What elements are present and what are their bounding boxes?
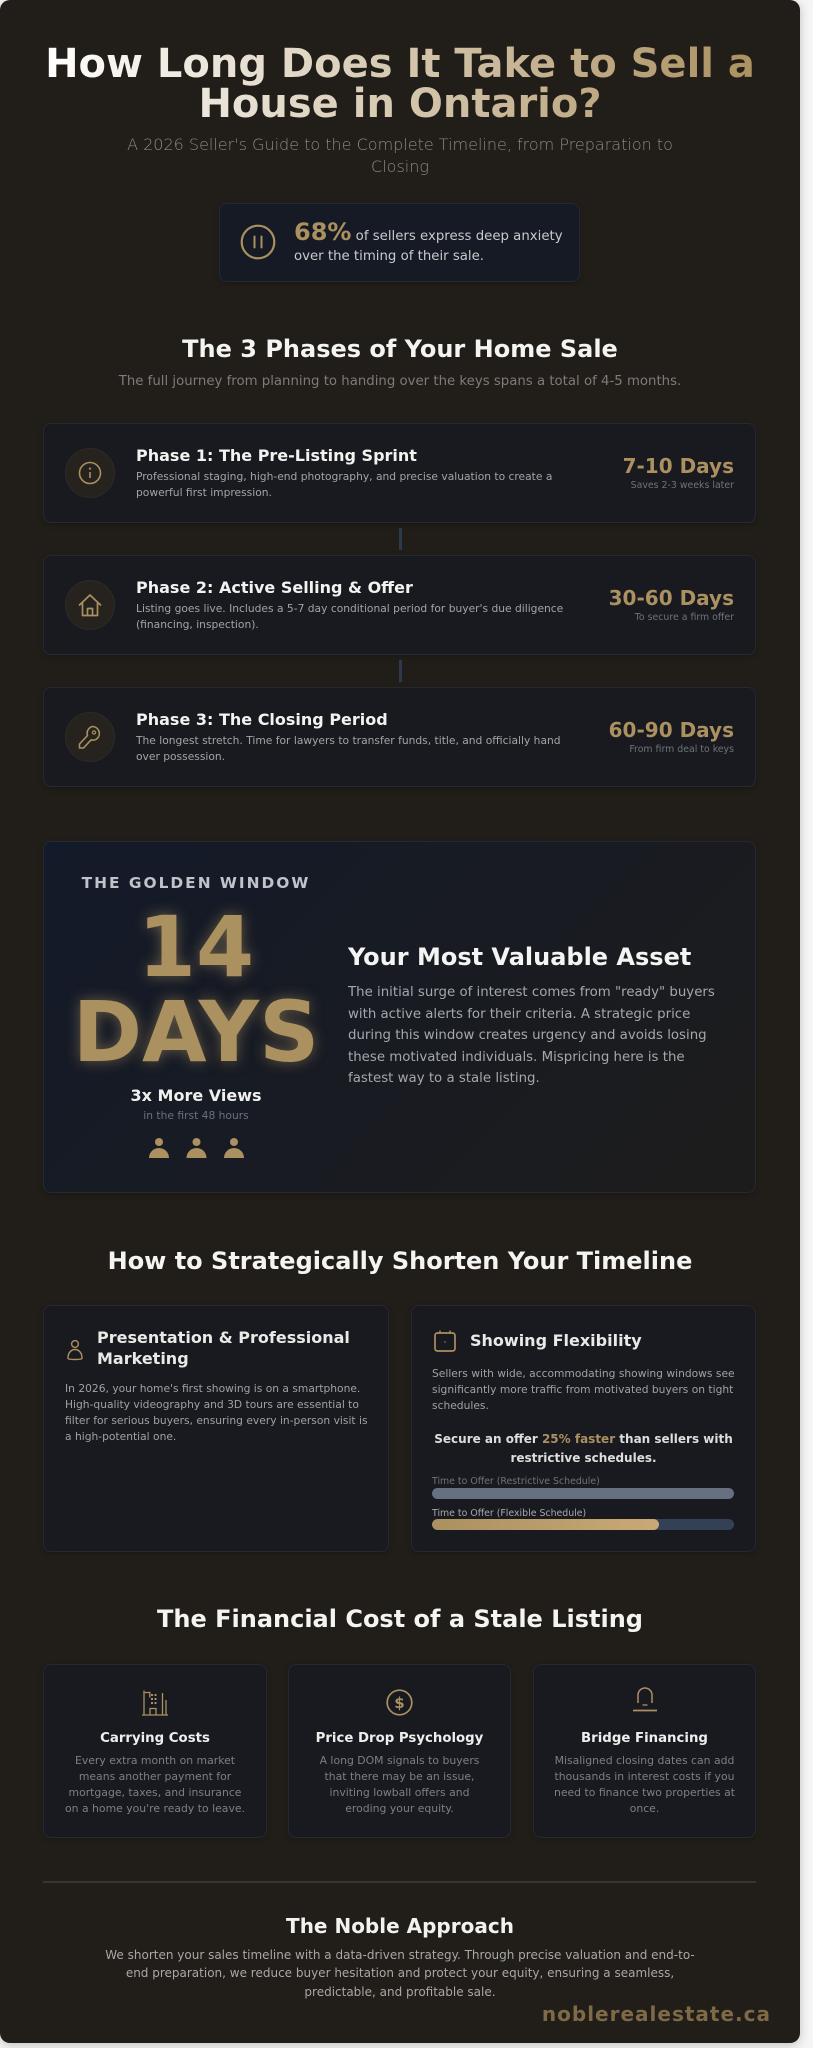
phase 3 description: The longest stretch. Time for lawyers to transfer funds, title, and officially hand	[136, 734, 561, 747]
carrying costs text: mortgage, taxes, and insurance	[69, 1786, 241, 1799]
noble approach paragraph: predictable, and profitable sale.	[304, 1985, 496, 1999]
asset paragraph: these motivated individuals. Mispricing here is the	[348, 1050, 685, 1065]
subtitle: A 2026 Seller's Guide to the Complete Timeline, from Preparation to	[127, 135, 673, 154]
icon: calendar	[434, 1330, 456, 1352]
golden window label: THE GOLDEN WINDOW	[82, 874, 310, 892]
phase 1 description: powerful first impression.	[136, 486, 272, 499]
noble approach heading: The Noble Approach	[286, 1914, 514, 1938]
phases subheading: The full journey from planning to handing over the keys spans a total of 4-5 months.	[119, 374, 681, 389]
asset paragraph: during this window creates urgency and avoids losing	[348, 1028, 707, 1043]
panel: phase 1	[43, 423, 756, 523]
icon: info	[65, 448, 115, 498]
presentation title	[97, 1328, 350, 1368]
phase 2 description	[136, 602, 563, 631]
icon: three people	[149, 1138, 244, 1158]
heading: phases: The 3 Phases of Your Home Sale	[182, 335, 618, 363]
asset paragraph	[348, 985, 715, 1086]
icon: house	[65, 580, 115, 630]
carrying costs text	[65, 1754, 245, 1815]
panel: showing flexibility	[411, 1305, 756, 1552]
phase 1 title: Phase 1: The Pre-Listing Sprint	[136, 446, 417, 465]
presentation paragraph: a high-potential one.	[65, 1430, 176, 1443]
price drop text: A long DOM signals to buyers	[320, 1754, 479, 1767]
phase 3 title: Phase 3: The Closing Period	[136, 710, 388, 729]
panel: price drop	[288, 1664, 511, 1838]
icon: building	[142, 1690, 168, 1716]
phase 2 description: (financing, inspection).	[136, 618, 259, 631]
title	[30, 44, 770, 124]
presentation paragraph: In 2026, your home's first showing is on a smartphone.	[65, 1382, 360, 1395]
phase 3 description	[136, 734, 561, 763]
flexible label: Time to Offer (Flexible Schedule)	[432, 1508, 586, 1519]
panel: presentation	[43, 1305, 389, 1552]
noble approach paragraph: end preparation, we reduce buyer hesitation and protect your equity, ensuring a seamless,	[126, 1966, 674, 1980]
phase 3 duration: 60-90 Days	[609, 718, 734, 742]
presentation paragraph: filter for serious buyers, ensuring every in-person visit is	[65, 1414, 368, 1427]
big 14 days	[72, 898, 320, 1080]
panel: phase 2	[43, 555, 756, 655]
presentation paragraph	[65, 1382, 368, 1443]
carrying costs text: Every extra month on market	[75, 1754, 235, 1767]
panel: golden window	[43, 841, 756, 1193]
phase 3 description: over possession.	[136, 750, 225, 763]
phase 1 duration: 7-10 Days	[623, 454, 734, 478]
presentation title: Marketing	[97, 1349, 189, 1368]
asset paragraph: fastest way to a stale listing.	[348, 1071, 540, 1086]
phase 1 note: Saves 2-3 weeks later	[631, 480, 734, 491]
offer callout: restrictive schedules.	[510, 1450, 657, 1464]
phase 2 description: Listing goes live. Includes a 5-7 day conditional period for buyer's due diligence	[136, 602, 563, 615]
stat box: 68%	[219, 203, 580, 282]
bridge financing text: once.	[630, 1802, 659, 1815]
presentation paragraph: High-quality videography and 3D tours are essential to	[65, 1398, 359, 1411]
noble approach paragraph: We shorten your sales timeline with a data-driven strategy. Through precise valuation and end-to-	[105, 1948, 695, 1962]
price drop text	[320, 1754, 479, 1815]
phase 1 description	[136, 470, 552, 499]
icon: key	[65, 712, 115, 762]
bridge financing text: need to finance two properties at	[554, 1786, 735, 1799]
phase 2 duration: 30-60 Days	[609, 586, 734, 610]
phase 2 title: Phase 2: Active Selling & Offer	[136, 578, 413, 597]
restrictive label: Time to Offer (Restrictive Schedule)	[432, 1476, 600, 1487]
presentation title: Presentation & Professional	[97, 1328, 350, 1347]
connector	[399, 528, 402, 550]
price drop text: inviting lowball offers and	[329, 1786, 470, 1799]
price drop text: that there may be an issue,	[325, 1770, 474, 1783]
icon: dollar: $	[394, 1694, 405, 1712]
title: How Long Does It Take to Sell a	[45, 40, 755, 86]
asset paragraph: with active alerts for their criteria. A strategic price	[348, 1007, 690, 1022]
icon: bridge	[633, 1687, 657, 1712]
price drop title: Price Drop Psychology	[316, 1731, 483, 1746]
views stat: 3x More Views	[130, 1086, 262, 1105]
showing title: Showing Flexibility	[470, 1331, 642, 1350]
carrying costs title: Carrying Costs	[100, 1731, 210, 1746]
noble approach paragraph	[105, 1948, 695, 1999]
price drop text: eroding your equity.	[345, 1802, 454, 1815]
asset paragraph: The initial surge of interest comes from "ready" buyers	[348, 985, 715, 1000]
bridge financing text: thousands in interest costs if you	[555, 1770, 734, 1783]
subtitle	[127, 135, 673, 176]
icon: person outline	[67, 1340, 83, 1360]
icon: dollar	[386, 1689, 413, 1716]
stat text: 68% of sellers express deep anxiety	[294, 218, 563, 246]
showing paragraph: significantly more traffic from motivated buyers on tight	[432, 1383, 733, 1396]
big 14 days: 14	[138, 898, 254, 996]
title: House in Ontario?	[198, 80, 602, 126]
stat text	[294, 218, 563, 264]
connector	[399, 660, 402, 682]
showing paragraph: Sellers with wide, accommodating showing windows see	[432, 1367, 735, 1380]
views note: in the first 48 hours	[143, 1109, 249, 1122]
panel: carrying costs	[43, 1664, 267, 1838]
carrying costs text: means another payment for	[79, 1770, 231, 1783]
big 14 days: DAYS	[73, 982, 319, 1080]
subtitle: Closing	[371, 156, 429, 176]
bar chart: time to offer	[432, 1476, 734, 1530]
brand url: noblerealestate.ca	[542, 2002, 771, 2026]
showing paragraph	[432, 1367, 735, 1412]
flexible bar	[432, 1519, 734, 1530]
phase 1 description: Professional staging, high-end photography, and precise valuation to create a	[136, 470, 552, 483]
icon: pause circle	[240, 224, 276, 260]
asset heading: Your Most Valuable Asset	[348, 943, 691, 971]
offer callout	[434, 1432, 733, 1464]
bridge financing text: Misaligned closing dates can add	[555, 1754, 734, 1767]
bridge financing text	[554, 1754, 735, 1815]
heading: financial cost: The Financial Cost of a Stale Listing	[157, 1605, 643, 1633]
phase 3 note: From firm deal to keys	[629, 744, 734, 755]
panel: bridge financing	[533, 1664, 756, 1838]
heading: shorten timeline: How to Strategically Shorten Your Timeline	[108, 1247, 692, 1275]
restrictive bar	[432, 1488, 734, 1498]
bridge financing title: Bridge Financing	[581, 1731, 708, 1746]
carrying costs text: on a home you're ready to leave.	[65, 1802, 245, 1815]
offer callout: Secure an offer 25% faster than sellers with	[434, 1432, 733, 1446]
phase 2 note: To secure a firm offer	[635, 612, 734, 623]
showing paragraph: schedules.	[432, 1399, 489, 1412]
stat text: over the timing of their sale.	[294, 248, 484, 264]
panel: phase 3	[43, 687, 756, 787]
